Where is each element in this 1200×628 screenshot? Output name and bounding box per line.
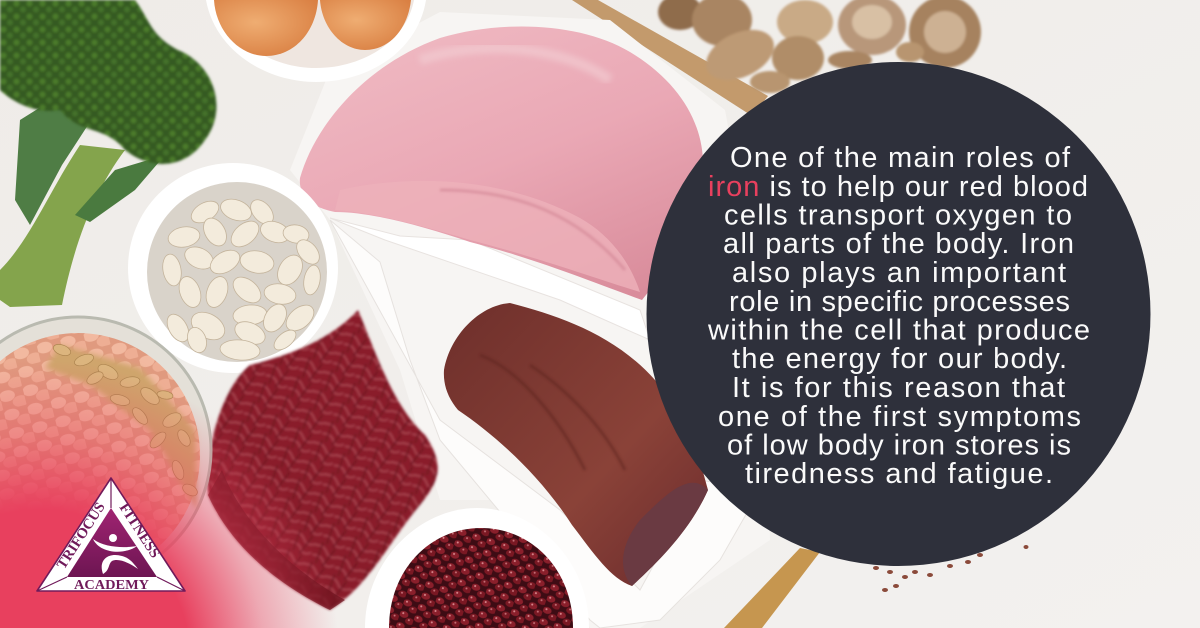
oat and lentil glass bowl	[0, 317, 211, 583]
body text: tiredness and fatigue.	[745, 458, 1053, 490]
body text: role in specific processes	[729, 286, 1070, 318]
body text: cells transport oxygen to	[724, 200, 1072, 232]
broccoli	[0, 0, 216, 307]
body text: within the cell that produce	[707, 314, 1090, 346]
mushrooms	[658, 0, 981, 93]
body text: all parts of the body. Iron	[723, 228, 1074, 260]
wooden board handle, bottom	[724, 548, 820, 628]
body text	[707, 142, 1090, 490]
body text: also plays an important	[732, 257, 1066, 289]
liver	[444, 303, 708, 586]
chicken breast	[300, 26, 703, 300]
body text: one of the first symptoms	[718, 401, 1081, 433]
logo text: Fitness: FITNESS	[116, 500, 163, 561]
beef steak	[208, 310, 438, 610]
red bean bowl	[365, 508, 589, 628]
white bean bowl	[128, 163, 338, 373]
wooden board handle, top	[572, 0, 768, 116]
body text: iron is to help our red blood	[708, 171, 1088, 203]
logo text: Trifocus: TRIFOCUS	[54, 500, 109, 572]
white paper sheet	[290, 12, 770, 628]
logo: Trifocus Fitness Academy	[37, 478, 185, 592]
body text: One of the main roles of	[730, 142, 1071, 174]
small scattered red beans	[873, 545, 1028, 592]
logo text: Academy: ACADEMY	[74, 577, 149, 592]
body text: It is for this reason that	[732, 372, 1065, 404]
red gradient overlay, lower left	[0, 340, 345, 628]
body text: of low body iron stores is	[727, 430, 1071, 462]
dark circle callout	[646, 62, 1150, 566]
egg bowl	[206, 0, 426, 82]
body text: the energy for our body.	[732, 343, 1067, 375]
